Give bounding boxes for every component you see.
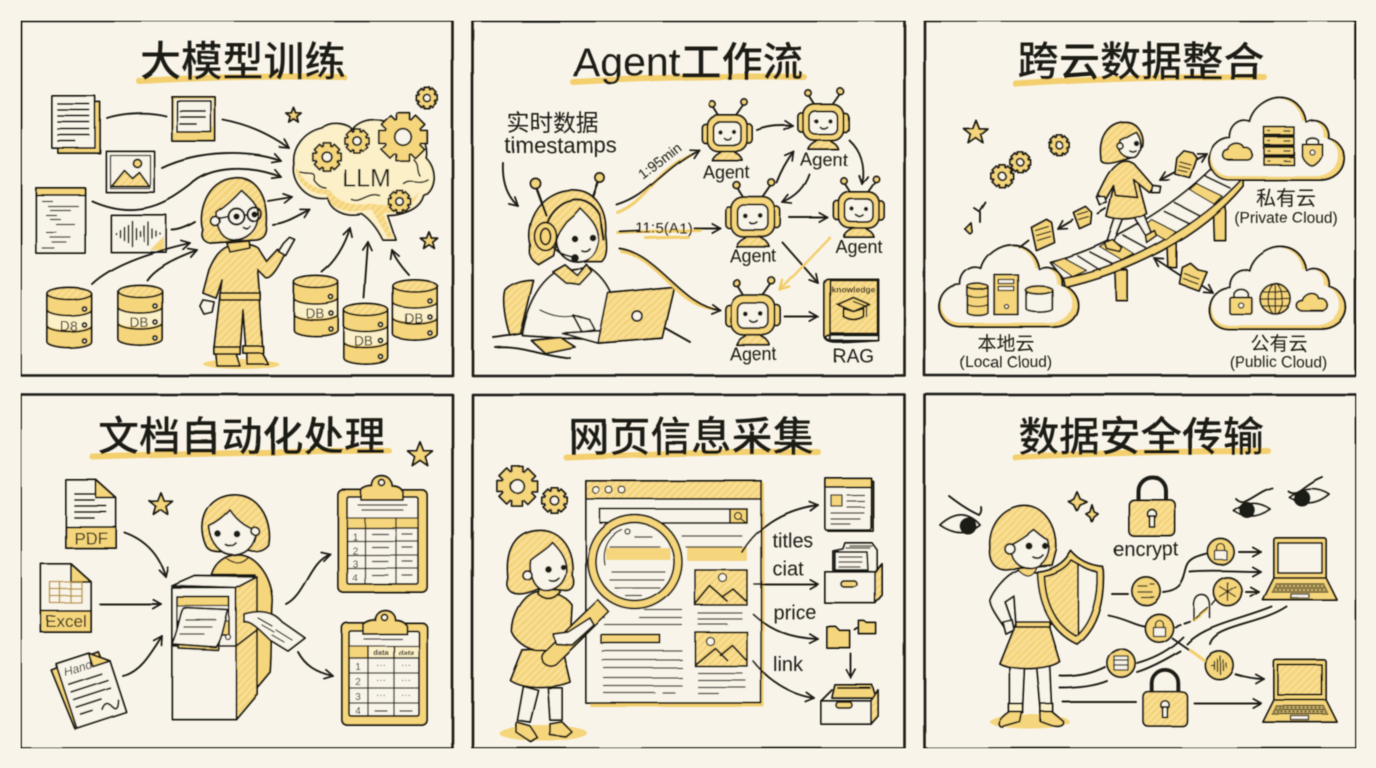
icon: laptop bottom <box>1263 660 1337 722</box>
icon: watching eyes right <box>1234 477 1329 517</box>
label: encrypt: encrypt <box>1113 539 1179 561</box>
flow arrows to LLM <box>92 113 409 298</box>
icon: top gear and stars <box>286 88 438 248</box>
decorative icons left <box>964 120 1069 234</box>
agent 5: Agent <box>729 344 777 364</box>
field labels <box>772 530 816 676</box>
icon: result clipboard 2: data <box>373 648 390 657</box>
field labels: titles <box>772 530 813 552</box>
icon: database 2: DB <box>130 315 148 330</box>
icon: result clipboard 2: ··· <box>376 690 386 701</box>
icon: database 3: DB <box>306 306 324 321</box>
icon: database 4: DB <box>355 334 373 349</box>
icon: PDF document <box>66 480 116 548</box>
title: document automation: 文档自动化处理 <box>98 414 386 460</box>
icon: result clipboard 1: 1 <box>352 532 358 543</box>
icon: result clipboard 2: ··· <box>401 660 411 671</box>
icon: Excel document <box>41 564 91 632</box>
character: girl crossing bridge <box>1097 122 1161 252</box>
icon: database 4 <box>344 304 388 364</box>
extraction arrows <box>742 505 818 698</box>
icon: file box 2 <box>821 685 878 724</box>
icon: result clipboard 2: ··· <box>401 690 411 701</box>
field labels: link <box>773 654 804 676</box>
label: RAG: RAG <box>832 346 874 367</box>
icon: audio waveform <box>111 215 166 252</box>
label: realtime data: timestamps <box>505 133 617 158</box>
magnifying glass <box>541 515 682 666</box>
character: girl behind machine <box>203 495 272 690</box>
label: public cloud: 公有云 <box>1250 333 1308 355</box>
cloud: local <box>940 245 1078 327</box>
icon: padlock top <box>1129 477 1175 536</box>
icon: PDF document: PDF <box>74 529 108 548</box>
agent 3 <box>726 180 780 266</box>
panel: document automation <box>20 394 452 748</box>
agent connector arrows <box>757 125 863 317</box>
label: realtime data: 实时数据 <box>507 110 599 136</box>
icon: scanning machine <box>172 576 305 719</box>
transfer arrows <box>1060 552 1287 703</box>
icon: file box 1 <box>825 543 882 603</box>
icon: result clipboard 2: 1 <box>355 662 361 673</box>
icon: result clipboard 2: ··· <box>376 675 386 686</box>
icon: result clipboard 2: 3 <box>355 692 361 703</box>
title: cross-cloud integration: 跨云数据整合 <box>1018 39 1264 85</box>
icon: result clipboard 1: 2 <box>352 546 358 557</box>
agent 1: Agent <box>702 162 750 182</box>
agent 2 <box>798 88 848 170</box>
agent 5 <box>726 278 780 364</box>
agent 3: Agent <box>729 246 777 266</box>
title: LLM training: 大模型训练 <box>140 39 346 85</box>
icon: database 5: DB <box>405 311 423 326</box>
label: local cloud: (Local Cloud) <box>960 354 1052 371</box>
icons: stars <box>150 442 432 515</box>
label: public cloud <box>1229 333 1327 371</box>
cloud: private <box>1210 98 1344 180</box>
icon: knowledge book: knowledge <box>831 284 875 294</box>
encryption node circles <box>1107 539 1242 679</box>
label: timestamp 2: 11:5(A1) <box>636 220 692 237</box>
panel: Agent workflow <box>472 20 904 376</box>
icon: result clipboard 1 <box>338 476 427 592</box>
agent 1 <box>702 99 752 182</box>
label: private cloud: 私有云 <box>1256 187 1316 210</box>
icon: result clipboard 2: 2 <box>355 677 361 688</box>
icon: padlock bottom <box>1143 670 1187 726</box>
panel: LLM training <box>20 20 452 376</box>
panel: cross-cloud integration <box>924 20 1356 376</box>
icon: result clipboard 2 <box>342 610 427 725</box>
icon: result clipboard 2: 4 <box>355 706 361 717</box>
icon: result clipboard 2: ··· <box>401 675 411 686</box>
icon: database stack left <box>48 288 92 348</box>
data documents and arrows <box>1019 151 1212 292</box>
label: timestamp 1: 1:95min <box>635 139 684 183</box>
cloud: public <box>1209 247 1346 329</box>
icon: brain LLM <box>293 120 434 240</box>
icon: handwritten document <box>50 648 127 730</box>
icon: database 5 <box>393 280 437 340</box>
label: LLM: LLM <box>343 165 391 193</box>
title: Agent workflow: Agent工作流 <box>573 39 803 85</box>
icon: folders <box>827 621 876 678</box>
icon: watching eye left <box>940 496 981 534</box>
label: realtime data <box>505 110 617 158</box>
panel: web scraping <box>472 394 904 748</box>
label: local cloud: 本地云 <box>977 333 1035 355</box>
character: girl with magnifying glass <box>499 530 587 742</box>
icon: result clipboard 2: ··· <box>376 660 386 671</box>
icon: database 2 <box>118 285 162 345</box>
panel: secure data transfer <box>924 394 1356 748</box>
label: private cloud: (Private Cloud) <box>1234 210 1338 227</box>
icon: framed page <box>172 97 215 141</box>
icon: text document <box>52 96 100 153</box>
icon: image <box>106 151 154 192</box>
icon: laptop top <box>1263 538 1337 600</box>
label: public cloud: (Public Cloud) <box>1229 354 1327 371</box>
icon: result clipboard 1: 3 <box>352 559 358 570</box>
icon: result clipboard 1: 4 <box>352 573 358 584</box>
field labels: ciat <box>772 558 804 580</box>
icon: gears <box>497 466 567 513</box>
icon: shield <box>1037 551 1103 644</box>
icon: database stack left: D8 <box>60 319 78 334</box>
field labels: price <box>773 602 816 624</box>
connector arrows from girl <box>503 150 720 310</box>
agent 4: Agent <box>835 237 883 257</box>
browser window <box>586 481 762 705</box>
icon: database 3 <box>294 276 338 336</box>
icon: sparkles <box>1069 492 1098 522</box>
label: local cloud <box>960 333 1052 371</box>
title: web scraping: 网页信息采集 <box>568 414 814 460</box>
flow arrows <box>100 533 333 676</box>
character: girl with glasses <box>200 178 295 369</box>
icon: brain gears <box>313 113 427 213</box>
character: girl with shield <box>990 506 1070 729</box>
character: girl with headset at laptop <box>493 174 690 358</box>
agent 2: Agent <box>800 150 848 170</box>
bridge <box>1050 168 1243 300</box>
icon: result clipboard 2: data <box>398 648 414 657</box>
icon: Excel document: Excel <box>45 612 87 631</box>
label: private cloud <box>1234 187 1338 227</box>
icon: result page <box>825 478 873 531</box>
icon: code document <box>36 188 85 253</box>
title: secure data transfer: 数据安全传输 <box>1018 414 1264 460</box>
icon: handwritten document: Hand <box>62 657 94 679</box>
agent 4 <box>834 176 884 257</box>
icon: knowledge book <box>824 279 878 342</box>
